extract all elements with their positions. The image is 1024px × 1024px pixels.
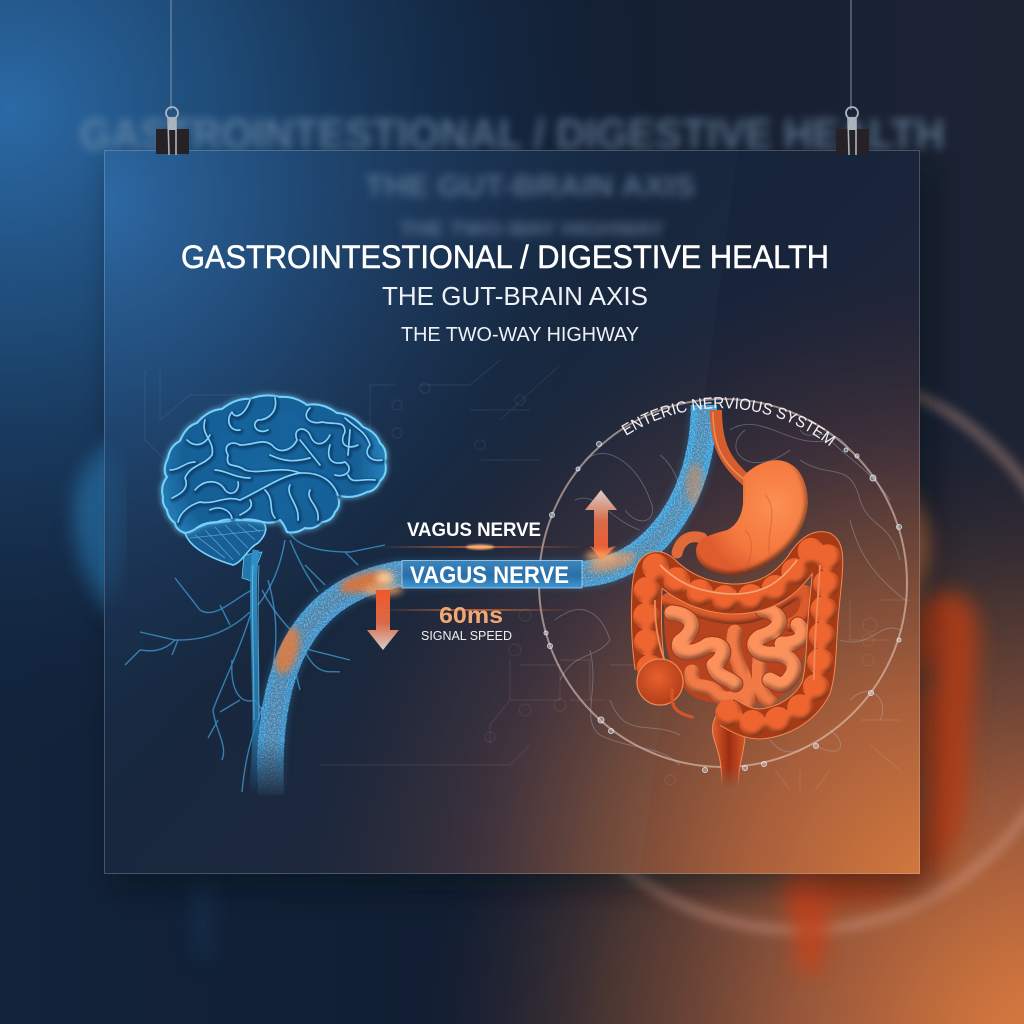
cecum <box>637 659 683 705</box>
glass panel <box>104 150 920 874</box>
esophagus stomach and intestines <box>637 410 828 788</box>
arrow up <box>585 490 617 561</box>
panel shadow <box>112 165 932 890</box>
brain nerve branches <box>125 530 385 792</box>
title: GASTROINTESTIONAL / DIGESTIVE HEALTH <box>181 239 829 275</box>
arrow down <box>363 584 403 650</box>
orange signal hot spots <box>270 463 704 676</box>
brainstem <box>242 550 262 795</box>
esophagus <box>713 410 748 482</box>
small intestine mass <box>664 588 809 705</box>
nerve tube highway <box>270 405 704 795</box>
large intestine colon <box>646 547 828 724</box>
signal speed value: 60ms <box>439 602 503 628</box>
stomach <box>696 460 808 575</box>
enteric nervous system label: ENTERIC NERVIOUS SYSTEM <box>621 397 836 446</box>
binder clip right <box>836 107 869 155</box>
appendix <box>672 690 692 717</box>
blurred title reflections on panel: THE GUT-BRAIN AXIS <box>365 170 695 203</box>
circuit traces <box>145 360 910 790</box>
rectum <box>713 708 745 788</box>
label: vagus nerve upper: VAGUS NERVE <box>407 519 541 541</box>
blurred title reflections on panel <box>365 170 695 241</box>
blurred background brain <box>75 420 215 960</box>
signal speed caption: SIGNAL SPEED <box>421 629 512 643</box>
brain <box>162 395 386 565</box>
subtitle: THE GUT-BRAIN AXIS <box>382 281 648 311</box>
binder clip left <box>156 107 189 155</box>
blurred title reflections on panel: THE TWO-WAY HIGHWAY <box>400 218 664 241</box>
cerebrum <box>162 395 386 533</box>
label box: vagus nerve: VAGUS NERVE <box>410 562 569 589</box>
ring network lines <box>555 424 905 765</box>
blurred background gut and ring <box>520 370 1024 972</box>
brain gyri folds <box>170 398 383 524</box>
cerebellum <box>185 520 266 565</box>
glow lines behind labels <box>375 544 585 611</box>
enteric nervous system ring <box>539 399 907 772</box>
blurred background title text: GASTROINTESTIONAL / DIGESTIVE HEALTH <box>80 110 944 159</box>
hanging wires <box>171 0 851 110</box>
duodenum <box>677 537 702 553</box>
blurred reflection of the brain inside the panel <box>104 440 122 610</box>
tagline: THE TWO-WAY HIGHWAY <box>401 324 639 346</box>
small intestine loops <box>668 592 807 705</box>
ring nodes <box>544 442 902 772</box>
